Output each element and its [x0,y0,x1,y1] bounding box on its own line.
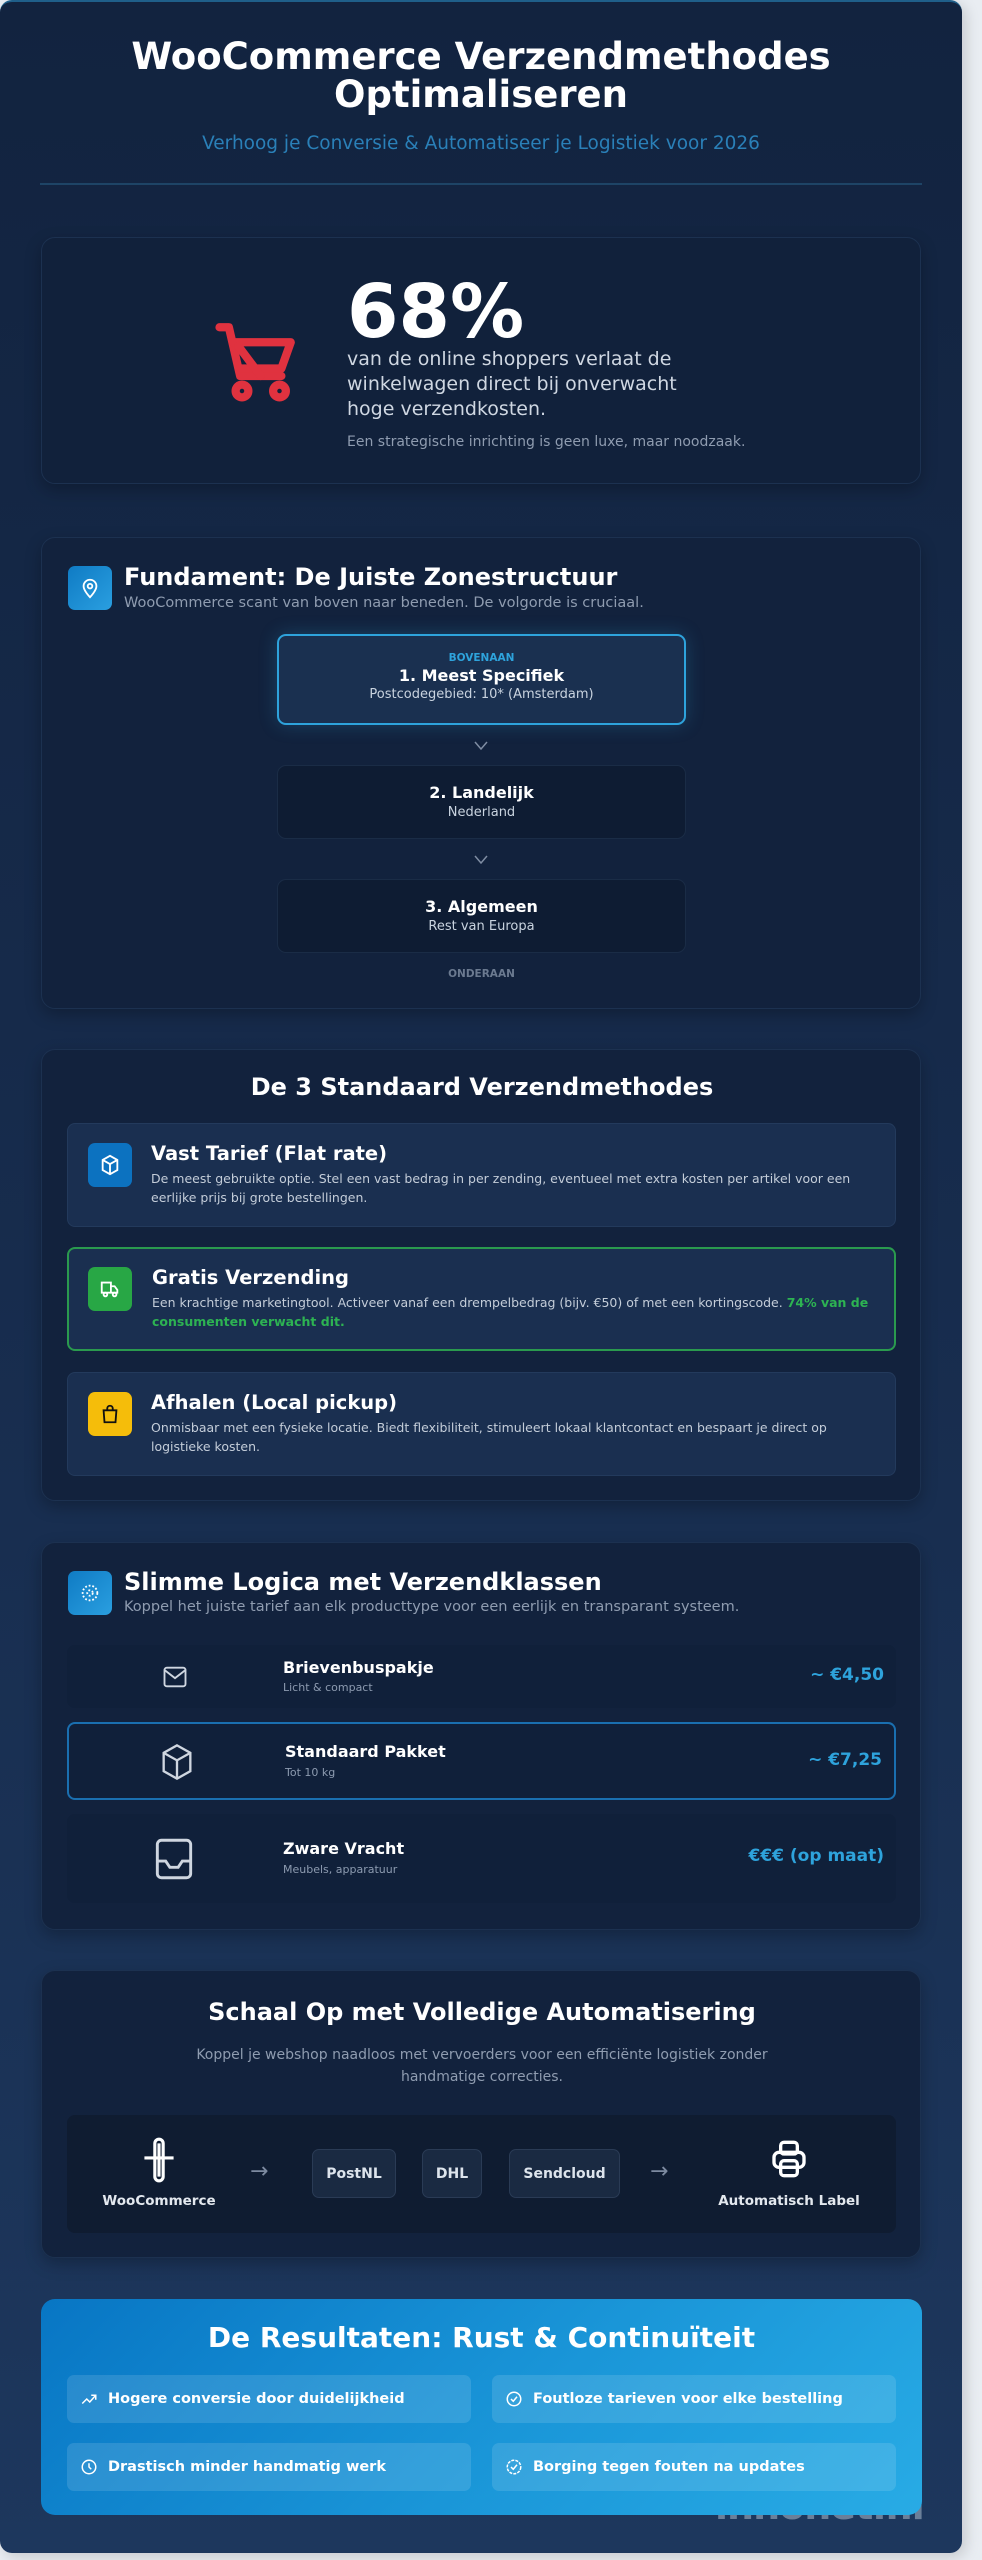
icon: cube [162,1744,192,1780]
stat description: van de online shoppers verlaat de winkelwagen direct bij onverwacht hoge verzendkosten. [347,348,677,420]
result item: Foutloze tarieven voor elke bestelling [533,2391,843,2407]
class row: standard parcel: ~ €7,25 [808,1750,882,1770]
carrier: PostNL: PostNL [326,2166,382,2182]
icon: shopping cart [215,323,295,402]
zone 3: Rest van Europa [428,919,535,934]
heading: Slimme Logica met Verzendklassen [124,1568,602,1596]
result item [492,2443,896,2491]
zone 1: BOVENAAN [449,652,514,664]
panel: results [41,2299,922,2515]
icon: truck [88,1267,132,1311]
zone 3: 3. Algemeen [425,897,538,916]
heading: Fundament: De Juiste Zonestructuur [124,563,617,591]
arrow: chevron [474,742,488,750]
zone 2: Nederland [448,805,515,820]
subheading: Koppel het juiste tarief aan elk producttype voor een eerlijk en transparant systeem. [124,1599,739,1615]
class row: standard parcel: Standaard Pakket [285,1742,446,1761]
zone 1 [277,634,686,725]
class row: letterbox [67,1645,896,1708]
class row: letterbox: ~ €4,50 [810,1665,884,1685]
icon: envelope [164,1666,186,1688]
method: free shipping: Gratis Verzending [152,1266,349,1289]
icon: location pin [68,566,112,610]
carrier: DHL [422,2149,482,2198]
icon: tray [156,1838,192,1880]
title [131,35,831,116]
class row: heavy freight [67,1814,896,1903]
panel: statistic 68% [41,237,921,484]
method: free shipping [67,1247,896,1351]
method: flat rate: De meest gebruikte optie. Stel een vast bedrag in per zending, eventueel met extra kosten per artikel voor een eerlijke prijs bij grote bestellingen. [151,1171,850,1205]
result item: Drastisch minder handmatig werk [108,2459,386,2475]
zone 3 [277,879,686,953]
class row: standard parcel [67,1722,896,1800]
arrow: chevron [474,856,488,864]
result item [67,2443,471,2491]
result item: Hogere conversie door duidelijkheid [108,2391,405,2407]
title: Optimaliseren [334,73,628,116]
result item [67,2375,471,2423]
icon: printer [772,2140,806,2178]
method: local pickup: Afhalen (Local pickup) [151,1391,397,1414]
icon: settings [68,1571,112,1615]
title: WooCommerce Verzendmethodes [131,35,831,78]
big number: 68% [347,269,524,355]
panel: shipping classes [41,1542,921,1930]
heading: De Resultaten: Rust & Continuïteit [208,2321,755,2354]
icon: plug [144,2138,174,2182]
arrow: → [250,2159,268,2184]
subtitle: Verhoog je Conversie & Automatiseer je Logistiek voor 2026 [202,133,760,154]
class row: heavy freight: €€€ (op maat) [748,1846,884,1866]
description: Koppel je webshop naadloos met vervoerders voor een efficiënte logistiek zonder handmatige correcties. [196,2047,768,2085]
method: local pickup: Onmisbaar met een fysieke locatie. Biedt flexibiliteit, stimuleert lokaal klantcontact en bespaart je direct op logistieke kosten. [151,1420,827,1454]
arrow: → [650,2159,668,2184]
class row: heavy freight: Meubels, apparatuur [283,1863,397,1876]
class row: standard parcel: Tot 10 kg [285,1766,335,1779]
zone 2: 2. Landelijk [429,783,534,802]
zone 2 [277,765,686,839]
result item: Borging tegen fouten na updates [533,2459,805,2475]
icon: box [88,1143,132,1187]
class row: letterbox: Licht & compact [283,1681,373,1694]
carrier: PostNL [312,2149,396,2198]
panel: shipping methods [41,1049,921,1501]
panel: automation [41,1970,921,2258]
flow diagram: WooCommerce [102,2193,216,2209]
bottom label: ONDERAAN [448,968,515,980]
watermark: innonet.nl [715,2484,924,2528]
zone 1: Postcodegebied: 10* (Amsterdam) [369,687,594,702]
flow diagram: Automatisch Label [718,2193,860,2209]
zone 1: 1. Meest Specifiek [399,666,564,685]
method: free shipping: Een krachtige marketingtool. Activeer vanaf een drempelbedrag (bijv. €50) of met een kortingscode. 74% van de consumenten verwacht dit. [152,1295,868,1329]
method: local pickup [67,1372,896,1476]
class row: letterbox: Brievenbuspakje [283,1658,434,1677]
subheading: WooCommerce scant van boven naar beneden. De volgorde is cruciaal. [124,595,644,611]
panel: zone structure [41,537,921,1009]
carrier: Sendcloud [509,2149,620,2198]
icon: bag [88,1392,132,1436]
carrier: DHL: DHL [436,2166,468,2182]
result item [492,2375,896,2423]
method: flat rate [67,1123,896,1227]
heading: De 3 Standaard Verzendmethodes [251,1073,713,1101]
heading: Schaal Op met Volledige Automatisering [208,1998,756,2026]
class row: heavy freight: Zware Vracht [283,1839,404,1858]
method: flat rate: Vast Tarief (Flat rate) [151,1142,387,1165]
flow diagram [67,2115,896,2233]
stat note: Een strategische inrichting is geen luxe, maar noodzaak. [347,434,745,450]
carrier: Sendcloud: Sendcloud [523,2166,606,2182]
